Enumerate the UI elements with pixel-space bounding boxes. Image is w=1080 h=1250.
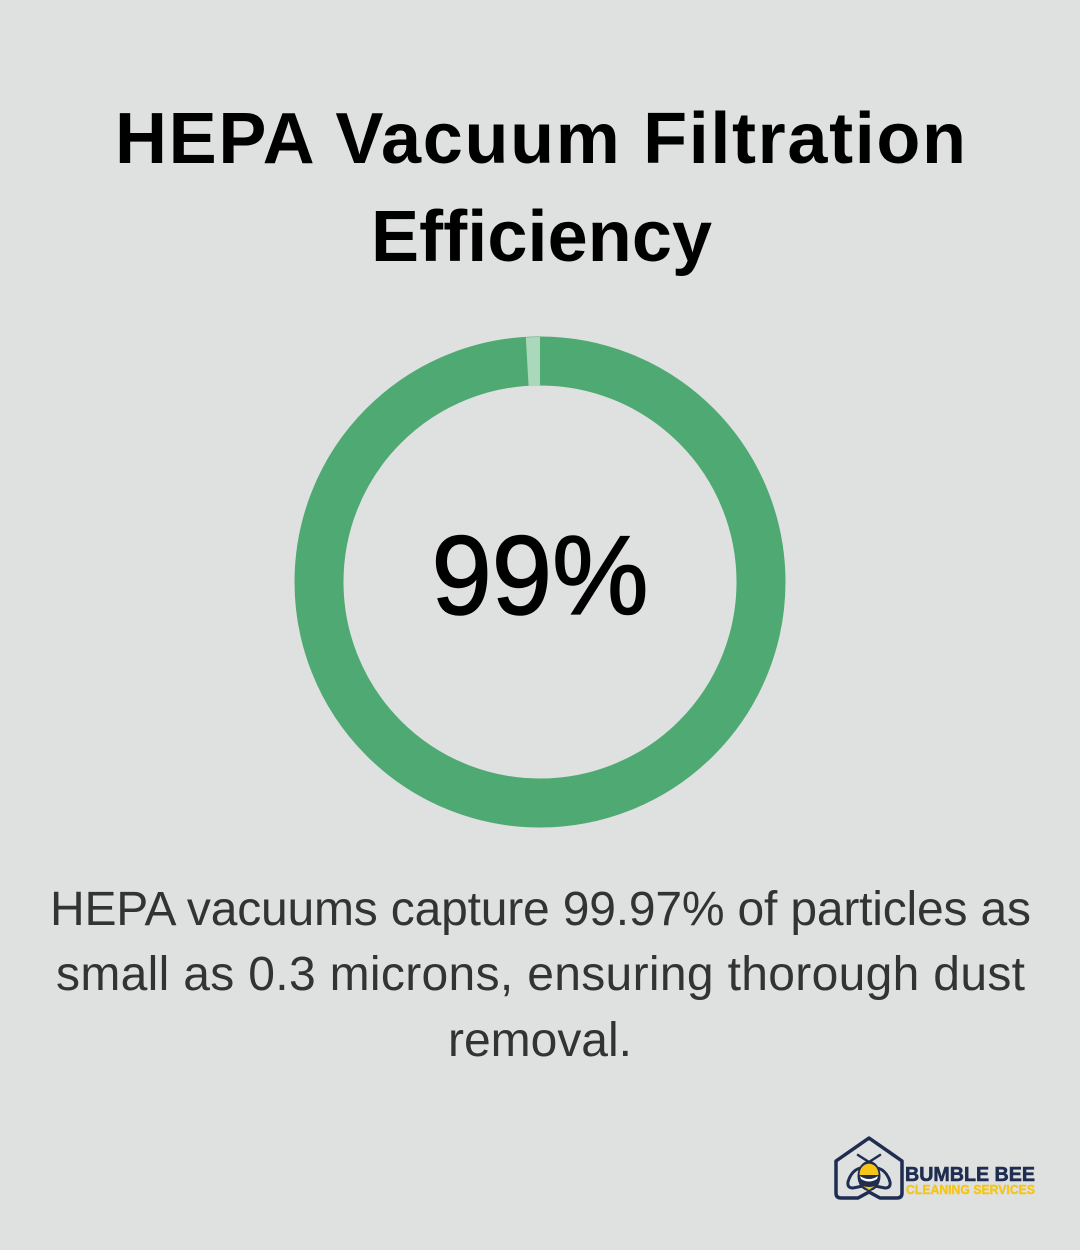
description text xyxy=(50,883,1031,1067)
donut chart: 99% xyxy=(319,337,761,803)
title xyxy=(115,99,966,277)
icon: house with bee xyxy=(836,1138,902,1198)
description text: removal. xyxy=(448,1014,632,1067)
title: HEPA Vacuum Filtration xyxy=(115,99,966,179)
description text: HEPA vacuums capture 99.97% of particles as xyxy=(50,883,1031,936)
logo tagline: CLEANING SERVICES xyxy=(906,1183,1035,1197)
logo wordmark: BUMBLE BEE xyxy=(905,1163,1035,1186)
logo: Bumble Bee Cleaning Services xyxy=(836,1138,1035,1198)
center value: 99% xyxy=(432,513,648,638)
description text: small as 0.3 microns, ensuring thorough dust xyxy=(56,948,1025,1001)
title: Efficiency xyxy=(371,197,712,277)
